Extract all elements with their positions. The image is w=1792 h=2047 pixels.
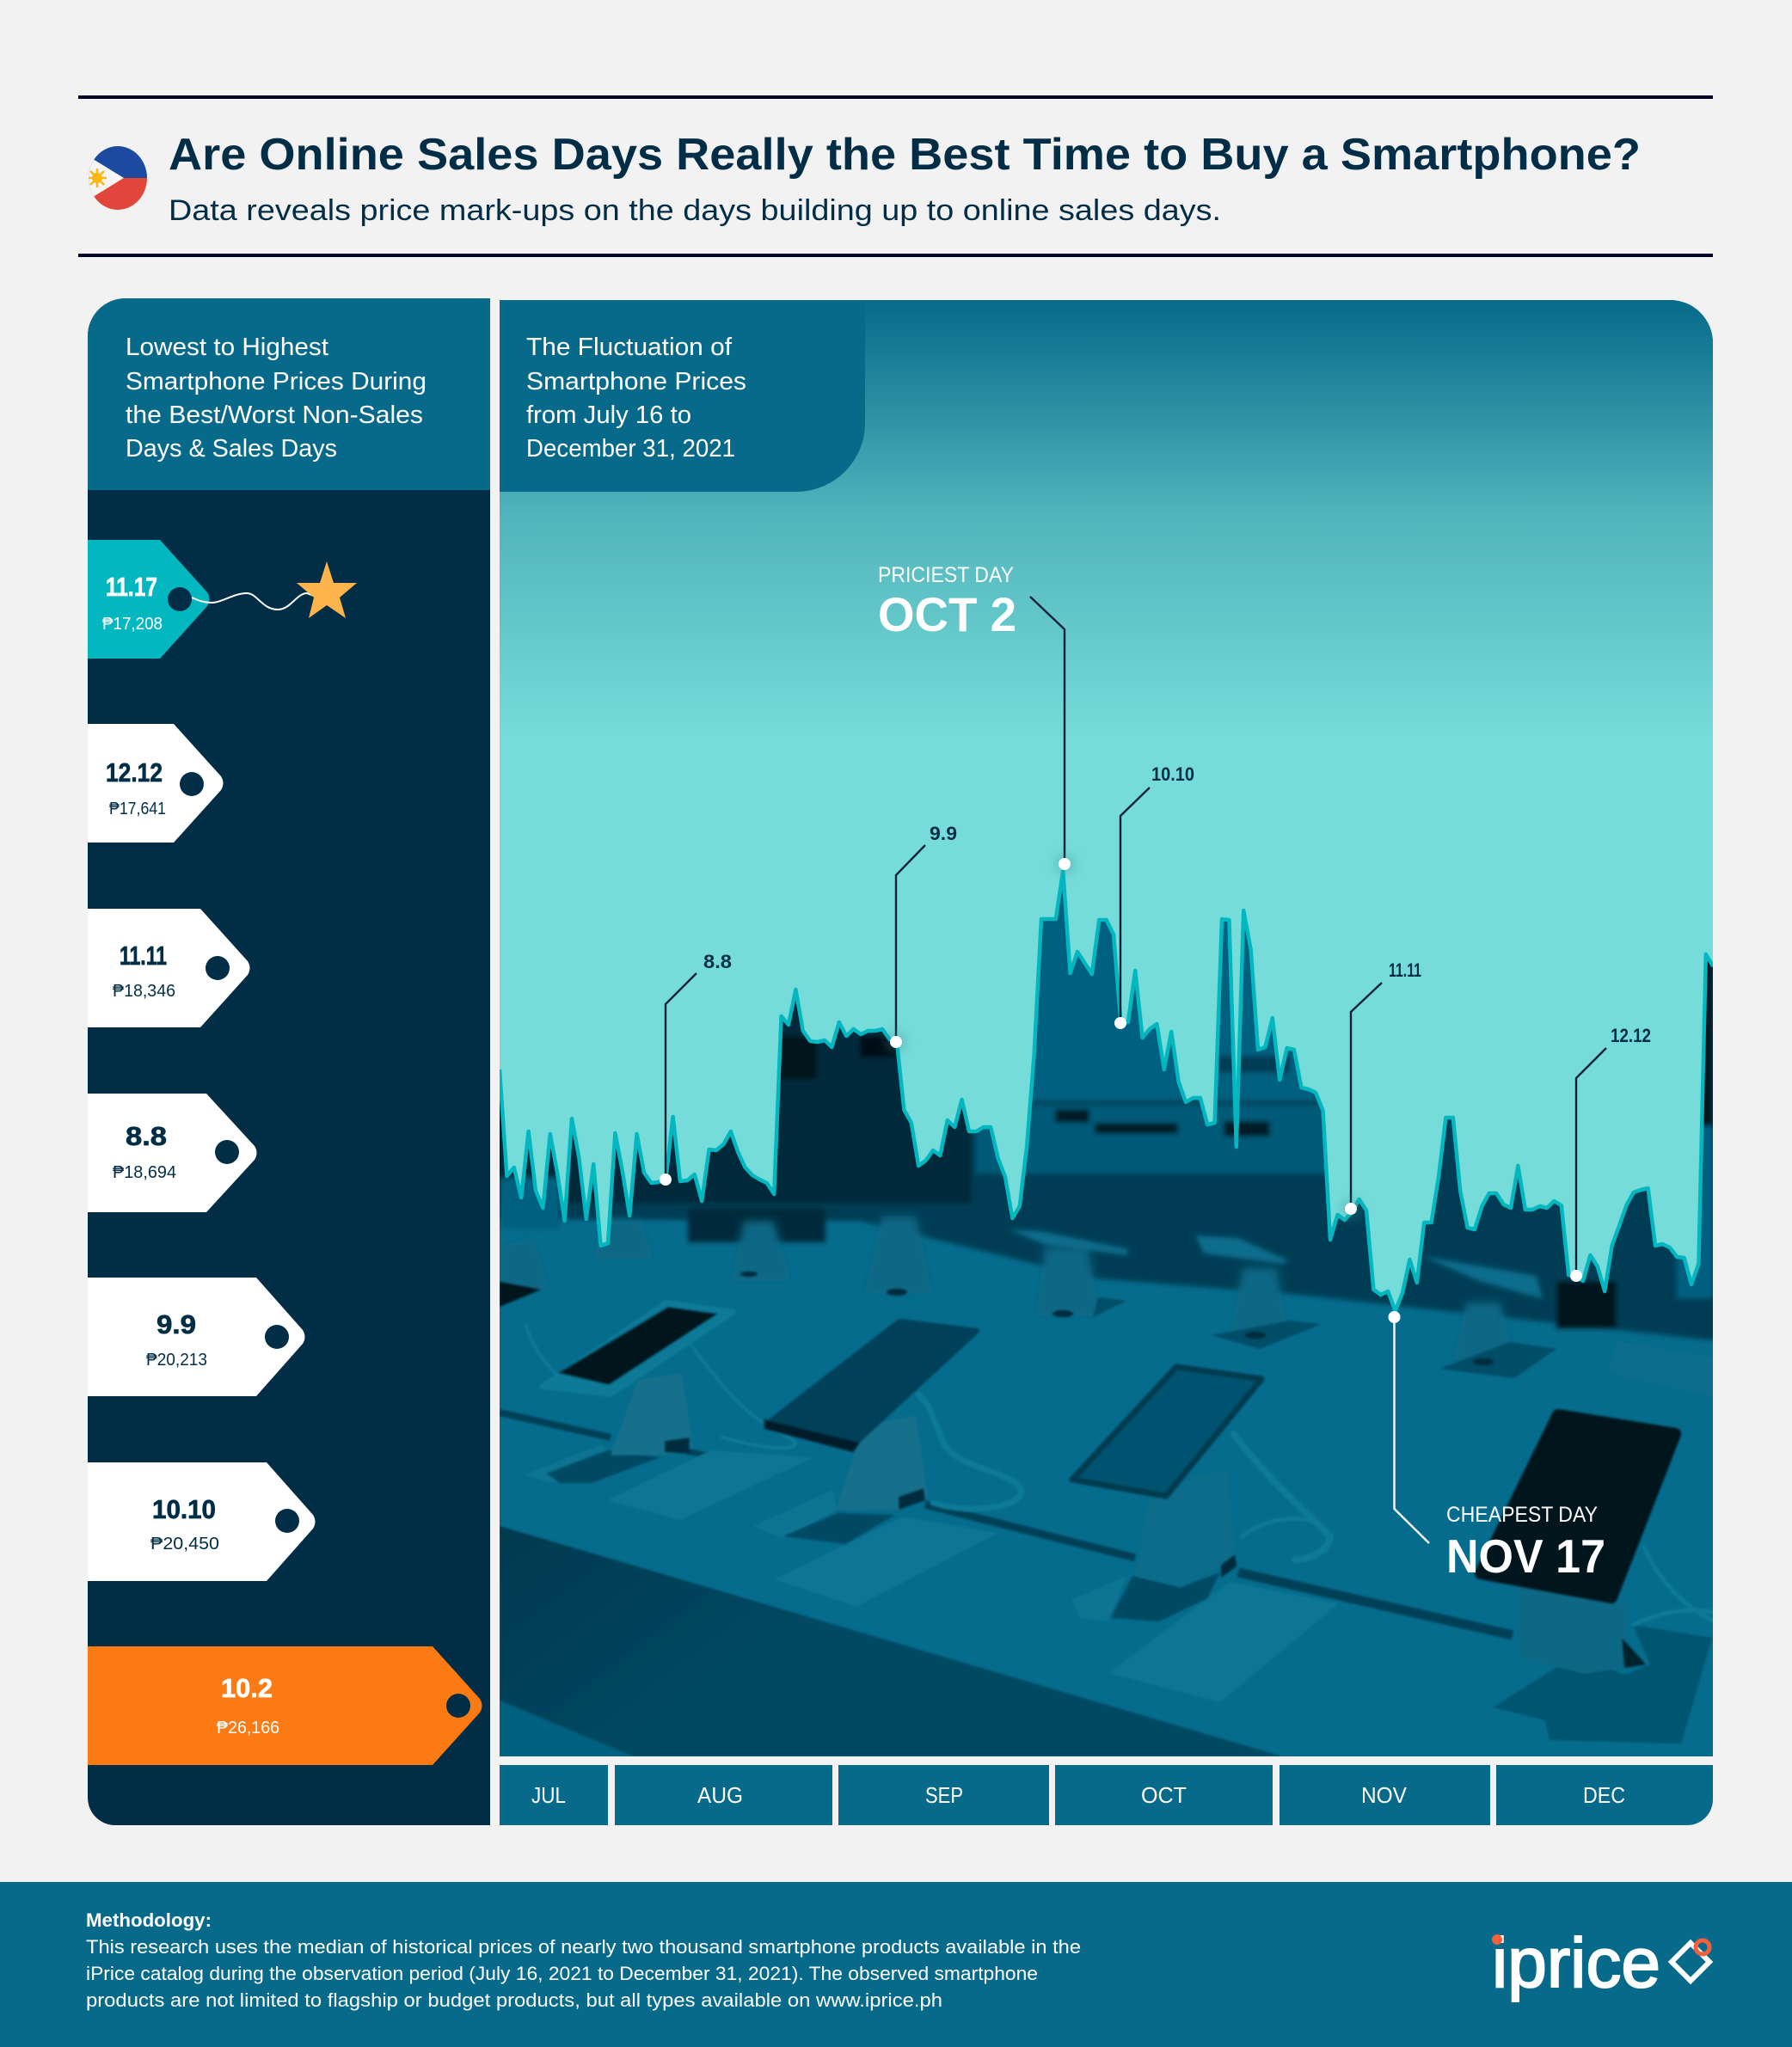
phone stands — [611, 1373, 1646, 1674]
icon: star — [297, 561, 357, 618]
marker: 9.9 — [886, 823, 957, 1052]
background stand tops — [1009, 1229, 1543, 1299]
marker: 8.8 — [660, 951, 732, 1186]
tag: 11.11 — [88, 909, 249, 1027]
photo background: smartphones on display — [482, 300, 1720, 1756]
panel header — [88, 298, 490, 490]
tag: 12.12: 12.12 — [106, 757, 163, 788]
chart heading text: from July 16 to — [526, 401, 691, 429]
background stand shadows — [1093, 1297, 1556, 1378]
month: DEC — [1496, 1765, 1713, 1825]
marker: 10.10: 10.10 — [1151, 763, 1194, 785]
callout: cheapest day: NOV 17 — [1446, 1529, 1605, 1583]
tag: 10.2 highest: ₱26,166 — [217, 1719, 279, 1737]
subtitle: Data reveals price mark-ups on the days building up to online sales days. — [169, 194, 1221, 227]
security cables — [526, 1326, 1713, 1625]
tag: 12.12 — [88, 724, 224, 843]
chart heading text: The Fluctuation of — [526, 334, 733, 361]
tag: 8.8: 8.8 — [126, 1121, 167, 1151]
panel background — [88, 298, 490, 1825]
tag: 11.17 lowest — [88, 540, 210, 659]
tag string — [192, 593, 316, 610]
price line — [500, 871, 1713, 1311]
marker: 10.10 — [1114, 763, 1194, 1029]
methodology text — [86, 1909, 1081, 2011]
small phone left — [500, 1282, 541, 1307]
tag: 9.9 — [88, 1278, 304, 1396]
tag: 8.8: ₱18,694 — [113, 1163, 176, 1182]
tag: 11.17 lowest: 11.17 — [106, 572, 157, 602]
callout: priciest day: PRICIEST DAY — [878, 563, 1014, 587]
panel heading text: Smartphone Prices During — [126, 368, 427, 395]
foreground front wedge — [500, 1526, 1282, 1756]
panel heading text: Days & Sales Days — [126, 435, 337, 463]
far right card — [1608, 1341, 1713, 1397]
month: DEC: DEC — [1583, 1782, 1625, 1808]
logo: iprice: iprice — [1492, 1924, 1660, 2002]
tag: 10.10: 10.10 — [152, 1494, 216, 1524]
phone 2 — [764, 1321, 977, 1452]
phone plates — [525, 1444, 1126, 1621]
callout: cheapest day — [1388, 1311, 1605, 1583]
month: JUL — [500, 1765, 608, 1825]
tag: 10.2 highest: 10.2 — [221, 1673, 273, 1703]
chart heading text — [526, 334, 746, 463]
marker: 11.11: 11.11 — [1389, 959, 1421, 981]
phone 3 — [1072, 1367, 1261, 1496]
phone 1 — [542, 1302, 733, 1394]
tag: 11.11: 11.11 — [120, 941, 167, 971]
title: Are Online Sales Days Really the Best Time to Buy a Smartphone? — [169, 130, 1641, 180]
header rule top — [78, 95, 1713, 99]
marker: 11.11 — [1341, 959, 1421, 1219]
callout: priciest day: OCT 2 — [878, 587, 1016, 641]
methodology text: iPrice catalog during the observation period (July 16, 2021 to December 31, 2021). The observed smartphone — [86, 1963, 1038, 1984]
tag: 8.8 — [88, 1094, 256, 1212]
callout: priciest day — [878, 563, 1075, 874]
month: OCT — [1055, 1765, 1273, 1825]
month: AUG — [615, 1765, 832, 1825]
month: AUG: AUG — [697, 1782, 743, 1808]
panel heading text: the Best/Worst Non-Sales — [126, 401, 423, 429]
month: NOV — [1280, 1765, 1490, 1825]
tag: 10.10: ₱20,450 — [150, 1535, 219, 1554]
month: SEP — [838, 1765, 1049, 1825]
panel: price fluctuation chart — [482, 300, 1720, 1756]
chart heading text: Smartphone Prices — [526, 368, 746, 395]
back wall of the store — [500, 890, 1713, 1343]
tag: 9.9: 9.9 — [156, 1309, 196, 1339]
tag: 11.17 lowest: ₱17,208 — [102, 615, 163, 634]
cable strip — [500, 1413, 1513, 1635]
icon: Philippines flag — [89, 146, 147, 210]
tag: 9.9: ₱20,213 — [146, 1351, 207, 1370]
marker: 12.12 — [1570, 1025, 1651, 1282]
footer band — [0, 1882, 1792, 2047]
panel heading text — [126, 334, 427, 463]
panel heading text: Lowest to Highest — [126, 334, 328, 361]
month axis — [500, 1765, 1713, 1825]
chart area fill above price line — [500, 300, 1713, 1311]
month: SEP: SEP — [925, 1782, 963, 1808]
methodology text: Methodology: — [86, 1909, 212, 1931]
methodology text: products are not limited to flagship or budget products, but all types available on www.iprice.ph — [86, 1989, 942, 2011]
panel: price tags ranking — [88, 298, 490, 1825]
tag: 11.11: ₱18,346 — [113, 982, 175, 1001]
marker: 12.12: 12.12 — [1611, 1025, 1651, 1046]
tag: 10.10 — [88, 1462, 315, 1581]
month: NOV: NOV — [1361, 1782, 1408, 1808]
callout: cheapest day: CHEAPEST DAY — [1446, 1503, 1598, 1527]
marker: 9.9: 9.9 — [930, 823, 957, 844]
month: JUL: JUL — [531, 1782, 566, 1808]
tag: 10.2 highest — [88, 1646, 482, 1765]
phone 4 — [1481, 1415, 1675, 1597]
header rule bottom — [78, 254, 1713, 257]
display cards — [607, 1450, 1339, 1702]
month: OCT: OCT — [1141, 1782, 1187, 1808]
background stands — [611, 1212, 1507, 1319]
phone base shadows — [546, 1450, 1712, 1744]
methodology text: This research uses the median of historical prices of nearly two thousand smartphone products available in the — [86, 1936, 1081, 1958]
marker: 8.8: 8.8 — [703, 951, 732, 972]
tag: 12.12: ₱17,641 — [109, 800, 166, 818]
chart heading text: December 31, 2021 — [526, 435, 735, 463]
chart heading box — [500, 323, 865, 492]
